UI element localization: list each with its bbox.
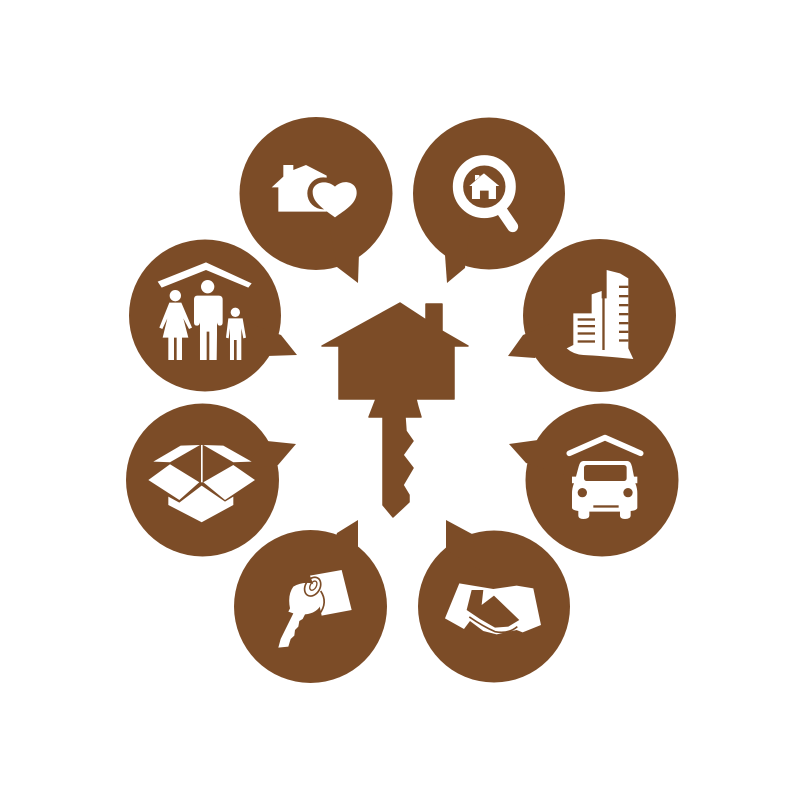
bubble: house with heart <box>240 117 392 283</box>
bubble: key with tag <box>234 520 387 683</box>
icon: magnifier with house <box>458 160 513 227</box>
icon: family <box>158 262 252 360</box>
bubble: family under roof <box>129 240 297 392</box>
icon: house and heart <box>272 165 357 217</box>
icon: open box <box>148 445 255 522</box>
bubble: house search <box>413 118 565 283</box>
bubble: building <box>508 239 676 392</box>
bubble: handshake <box>418 520 570 682</box>
central house key <box>322 303 468 517</box>
icon: handshake <box>445 583 541 634</box>
bubble: open box <box>126 404 296 556</box>
bubble: car in garage <box>509 404 678 556</box>
icon: buildings <box>567 270 633 359</box>
icon: car under roof <box>569 438 641 519</box>
icon: key and tag <box>278 570 352 648</box>
